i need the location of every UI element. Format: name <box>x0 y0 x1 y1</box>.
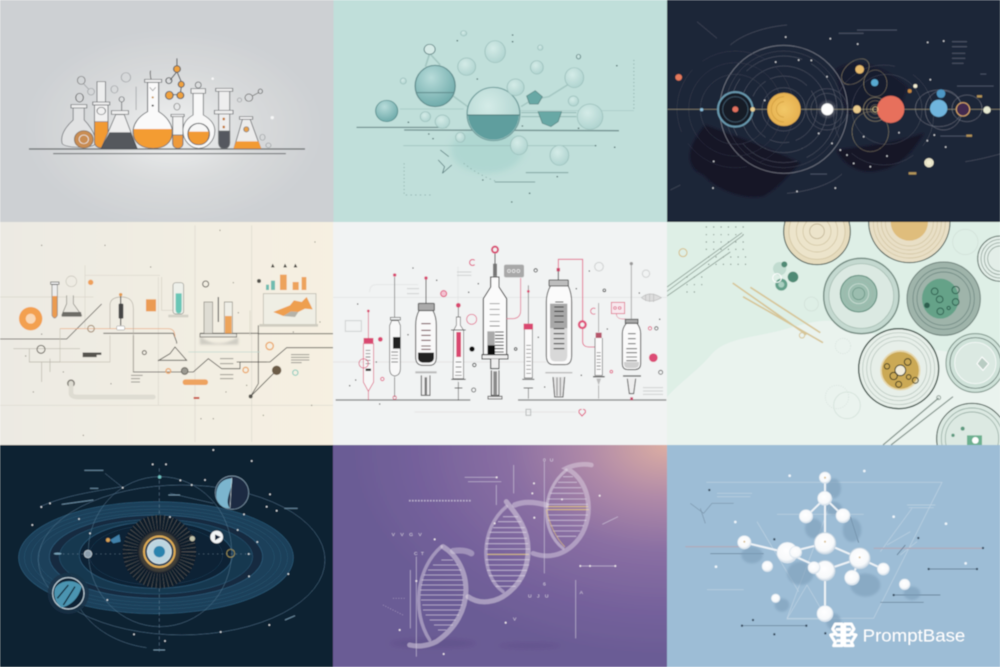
icon: slim orange tube <box>171 103 184 148</box>
icon: large orange flask <box>133 71 172 148</box>
scattered stars <box>713 37 946 191</box>
grey rods <box>883 396 953 445</box>
orbit rings right <box>837 54 982 152</box>
icon: ring flask <box>183 82 215 148</box>
dark text blocks <box>83 354 101 356</box>
planet: coral giant <box>853 96 904 123</box>
dish: tan upper <box>784 198 850 265</box>
syringe 4 pink <box>451 303 466 400</box>
pale wave <box>667 321 1000 445</box>
icon: dark test tube <box>214 88 233 149</box>
central sun rings <box>144 536 175 567</box>
dish: bottom right <box>937 403 1000 474</box>
icon: pipette in arch <box>117 293 125 330</box>
planet: top right crescent <box>215 476 249 509</box>
molecule: orange nodes <box>165 58 184 99</box>
speckles <box>26 230 320 435</box>
icon: round flask with swirl <box>62 93 95 148</box>
shelf lines <box>29 149 305 161</box>
small annotation text: V <box>513 617 518 623</box>
small annotation text: 6 <box>543 582 546 588</box>
panel: dark solar system <box>667 0 1000 222</box>
vial 3 <box>415 276 437 396</box>
faint labels <box>810 30 994 174</box>
triangles and faint geometry <box>685 482 982 619</box>
syringe 8 <box>593 303 605 399</box>
syringe 6 <box>522 285 534 399</box>
dark node with shadow <box>249 366 281 398</box>
black dots and rings <box>350 268 663 404</box>
dish: tan upper right <box>869 181 950 263</box>
icon: orange test tube <box>51 282 59 318</box>
planet: white crescent <box>210 531 223 543</box>
panel: dark orbital system <box>0 445 333 667</box>
panel: petri dishes <box>666 221 1000 446</box>
dark nebula shapes <box>690 63 924 197</box>
helix strands <box>410 464 591 646</box>
sphere: upper left teal <box>415 65 455 107</box>
dish: amber molecular culture <box>859 329 939 409</box>
horizontal lines <box>356 53 634 195</box>
sphere: left solid teal <box>376 100 398 122</box>
planet: bottom left striped <box>48 573 89 614</box>
icon: small flask on stand <box>62 276 93 317</box>
dotted caption <box>409 498 472 503</box>
monitor with area chart <box>259 294 318 327</box>
icon: small orange flask <box>234 117 261 148</box>
icon: brain mark <box>831 624 856 646</box>
icon: tube rack <box>200 297 238 345</box>
panel: teal glass molecule <box>334 0 667 222</box>
icon: lens and nodes <box>37 281 209 387</box>
baseline <box>336 398 666 402</box>
sphere: large center half filled <box>467 87 520 141</box>
syringe 2 <box>390 273 400 399</box>
dark dots <box>709 490 983 634</box>
floor shadows <box>390 639 561 648</box>
faint lines <box>333 267 667 412</box>
faint grid lines <box>0 225 333 442</box>
faint rings <box>804 229 978 419</box>
dish: green rings <box>824 258 899 334</box>
small atom centers <box>744 478 860 557</box>
outer thin orbits <box>38 468 325 652</box>
small node glyph <box>438 150 452 173</box>
soft glow under sphere <box>451 127 523 173</box>
large syringe <box>482 247 508 399</box>
faint icons <box>345 262 663 415</box>
axis line <box>667 108 1000 110</box>
annotation lines <box>383 462 618 657</box>
stars <box>32 450 288 641</box>
panel: laboratory flasks on a shelf <box>0 0 334 222</box>
small annotation text <box>392 458 584 623</box>
planets: blue and purple group <box>675 65 991 167</box>
annotation dots <box>400 477 615 654</box>
bar chart <box>257 264 306 290</box>
syringe 1 <box>359 310 374 400</box>
vial 9 with callout <box>611 262 641 400</box>
dark annotation lines <box>690 503 977 626</box>
molecule shadows <box>741 478 920 630</box>
panel: purple DNA helix <box>333 445 667 667</box>
teal pentagons <box>527 91 562 127</box>
orange rings <box>166 342 273 373</box>
molecule bonds <box>744 478 883 613</box>
orange pill <box>183 379 208 385</box>
icon: orange disc <box>19 307 42 330</box>
small glass spheres <box>400 31 603 165</box>
small annotation text: V V G V <box>392 532 424 538</box>
green bubble cluster <box>773 261 798 291</box>
icon: conical flask with dark liquid <box>101 97 137 148</box>
dish: top right edge <box>978 236 1000 281</box>
small annotation text: 0 U <box>543 458 555 464</box>
small annotation text: C T <box>414 551 425 557</box>
icon: teal vial <box>168 283 188 317</box>
planet: yellow sun <box>767 93 801 126</box>
main circuit lines <box>0 304 333 396</box>
faint labels <box>62 470 298 650</box>
dish: pale right <box>946 334 1000 392</box>
panel: blue molecule with logo <box>667 445 1000 667</box>
dish: dark green culture <box>907 262 980 335</box>
icon: orange square <box>146 299 156 311</box>
orbit rings left <box>670 22 1000 193</box>
soft grey pill <box>71 383 153 397</box>
small annotation text: A <box>580 590 584 596</box>
planet: white star <box>819 101 836 118</box>
faint DNA glyph <box>641 294 661 302</box>
grey label pill <box>504 265 524 319</box>
diagonal double lines <box>667 233 743 296</box>
small annotation text: U J U <box>528 593 550 599</box>
molecule: grey faint rings <box>77 73 274 148</box>
outer orbital band <box>19 502 293 614</box>
panel: beige science diagram <box>0 222 333 445</box>
PromptBase logo <box>831 624 965 646</box>
panel: syringes and vials <box>333 222 667 445</box>
golden rungs <box>487 507 589 554</box>
big vial 7 <box>545 259 583 397</box>
pink node with line <box>378 259 658 416</box>
sunburst <box>123 515 196 588</box>
scattered dots <box>408 35 617 202</box>
dot field <box>687 227 750 292</box>
rungs <box>420 477 588 630</box>
ring small gold <box>679 249 687 257</box>
wordmark: PromptBase <box>863 626 965 646</box>
tan rods <box>733 283 823 343</box>
orange and faint lines <box>13 277 260 382</box>
planet: blue ringed <box>700 92 755 127</box>
white glints <box>716 471 966 567</box>
icon: orange test tube <box>93 82 110 148</box>
small planets <box>54 475 235 558</box>
molecule atoms <box>738 472 910 622</box>
